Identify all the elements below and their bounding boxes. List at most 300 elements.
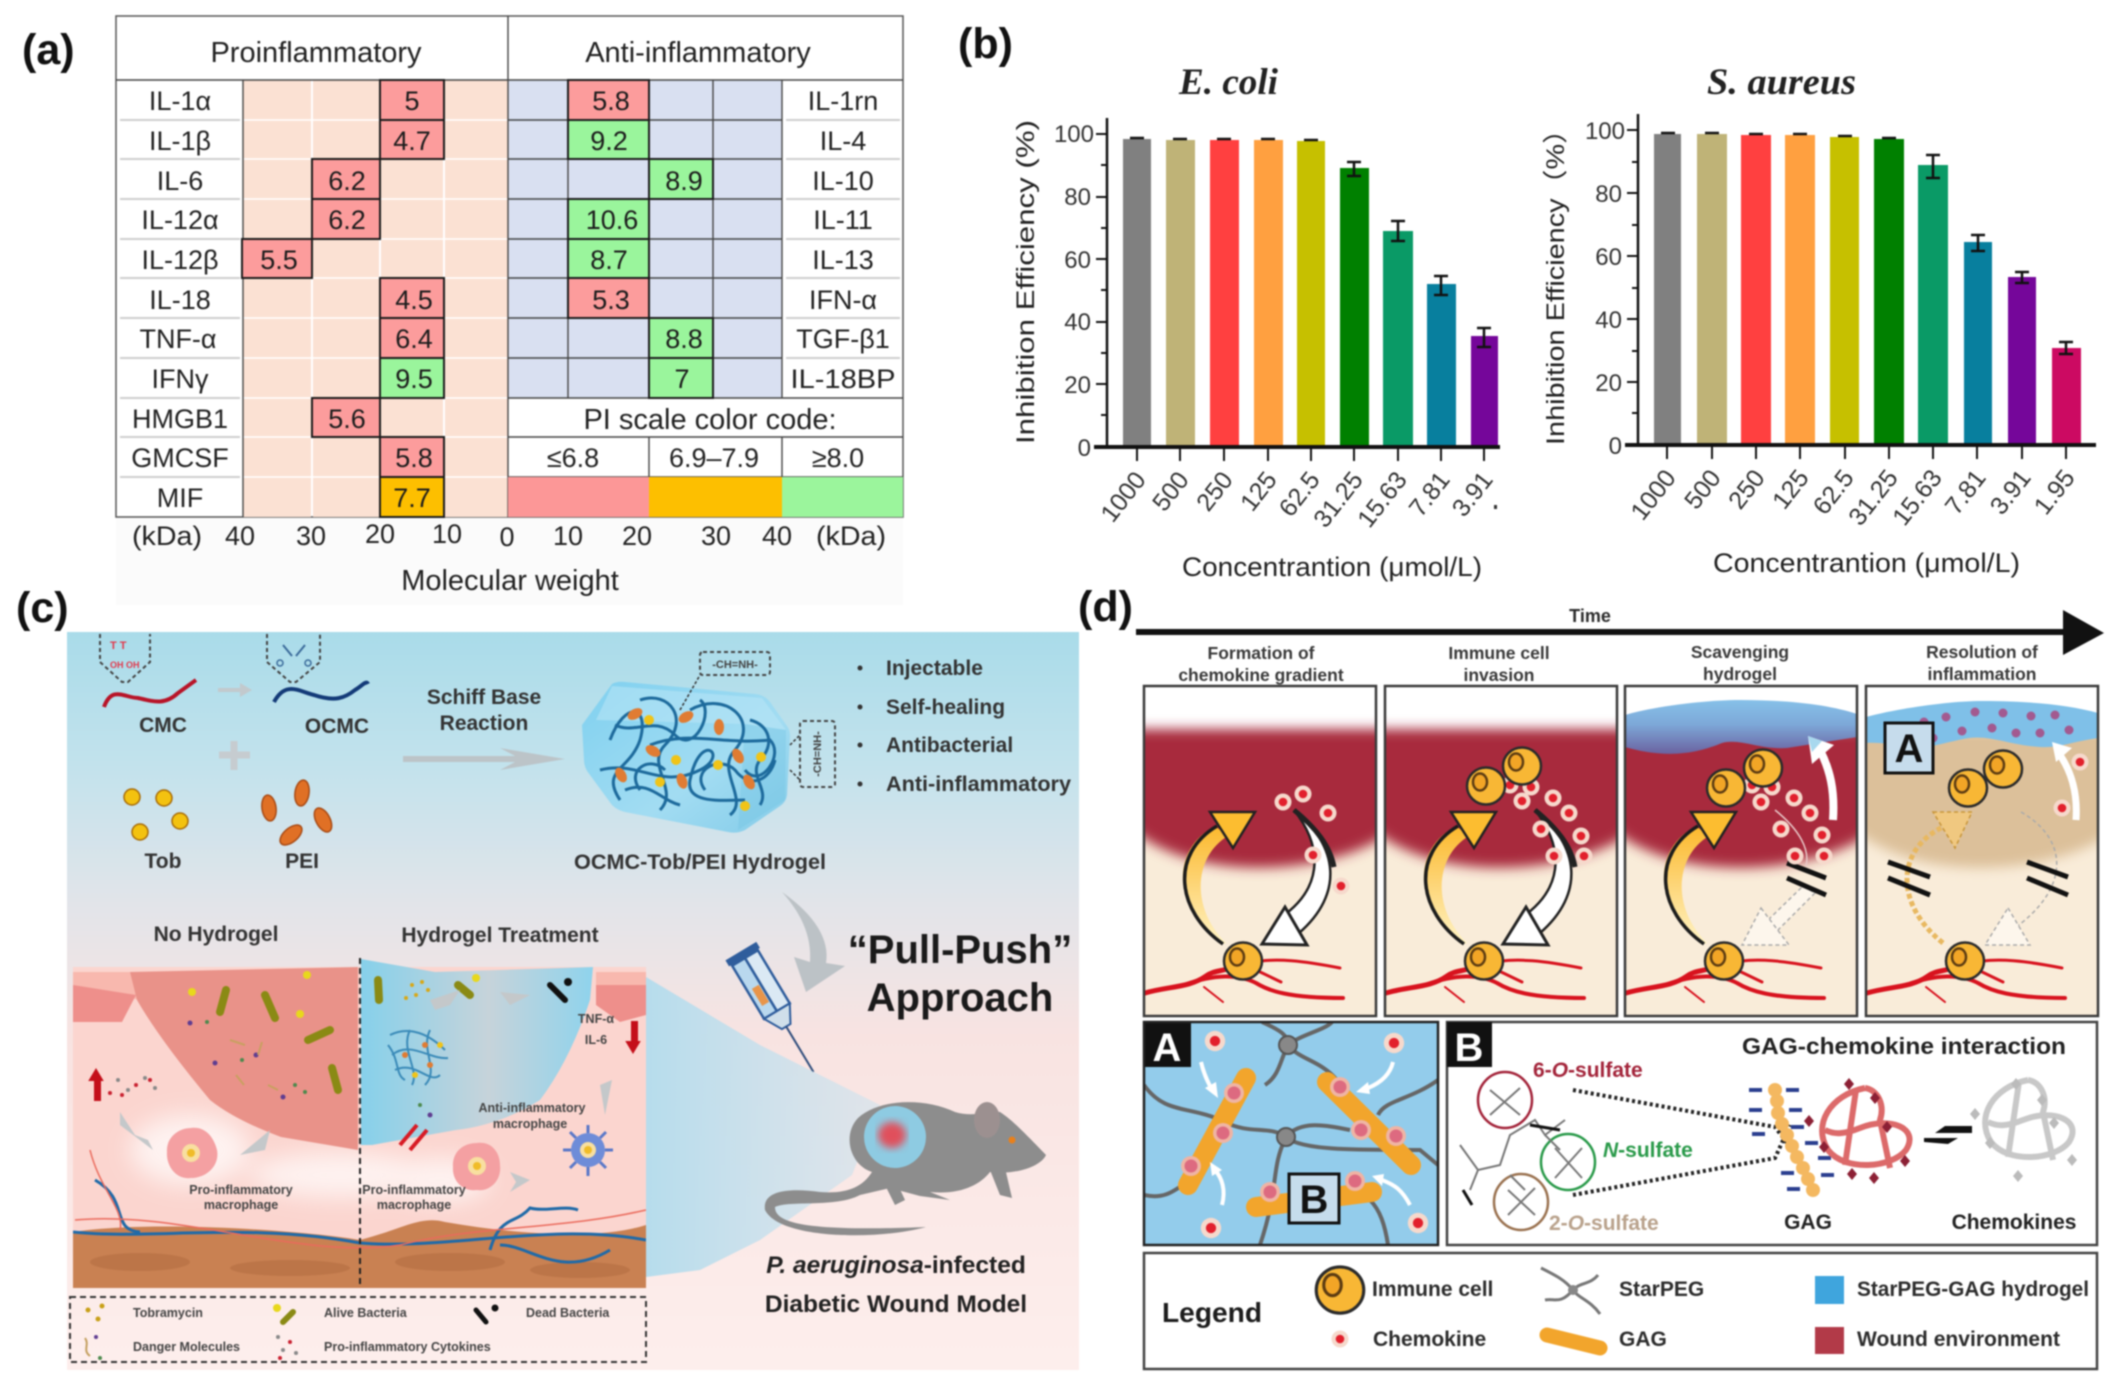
- callout: vertical bond: [800, 721, 835, 787]
- x tick labels: 15.63: [1887, 464, 1948, 531]
- heading: proinflammatory: Proinflammatory: [210, 37, 422, 69]
- wound environment: [1611, 729, 1871, 868]
- CMC label: CMC: [139, 714, 187, 737]
- chart title: E. coli: [1178, 62, 1279, 103]
- macrophage labels: [189, 1101, 586, 1212]
- PI scale colour code: ≥8.0: [812, 443, 864, 473]
- dashed arrow: [1742, 886, 1815, 945]
- x tick labels: 500: [1679, 464, 1727, 515]
- right row labels: IL-18BP: [790, 364, 896, 394]
- left cell values: 5: [404, 86, 420, 116]
- x tick labels: 250: [1191, 466, 1239, 517]
- molecular weight axis labels: 0: [499, 522, 515, 552]
- left cell values: 9.5: [395, 364, 433, 394]
- dashed immune arrow: [1907, 812, 1972, 943]
- CMC molecule: [100, 634, 196, 707]
- y tick labels: 60: [1064, 247, 1091, 274]
- blocked path marker: [400, 1125, 427, 1150]
- dotted connectors: [1573, 1090, 1800, 1195]
- macrophage labels: macrophage: [377, 1198, 451, 1212]
- molecular weight axis labels: 40: [762, 521, 792, 551]
- label: 6-O-sulfate: 6-O-sulfate: [1533, 1059, 1643, 1082]
- callout: CH=N- bond: [700, 652, 770, 675]
- GAG chain: [1768, 1083, 1820, 1197]
- left row labels: MIF: [157, 483, 203, 513]
- positive charges gray: [1970, 1078, 2077, 1182]
- reaction arrow: CMC to OCMC: [218, 683, 252, 697]
- label: 2-O-sulfate: 2-O-sulfate: [1549, 1212, 1659, 1235]
- cytokine decrease arrow: [627, 1022, 639, 1052]
- step heading 3: Scavenging: [1691, 642, 1789, 662]
- inset marker A: [1885, 723, 1933, 773]
- step heading 2: Immune cell: [1448, 643, 1550, 663]
- property bullets: Antibacterial: [886, 734, 1013, 757]
- x tick labels: 500: [1147, 466, 1195, 517]
- x tick labels: 31.25: [1308, 466, 1369, 533]
- chemokines: [2054, 754, 2088, 816]
- property bullets: [858, 657, 1071, 796]
- error bars: [1130, 138, 1491, 347]
- label: GAG: GAG: [1784, 1211, 1832, 1234]
- legend item: cytokines: [276, 1335, 491, 1360]
- OCMC label: OCMC: [305, 715, 369, 738]
- step heading 4: [1926, 642, 2038, 684]
- dashed return arrow: [1985, 812, 2057, 945]
- vessel: [1386, 960, 1584, 1002]
- left cell values: 7.7: [393, 483, 431, 513]
- network nodes: [1277, 1036, 1297, 1146]
- table footer band: [116, 517, 903, 605]
- icon: syringe: [725, 942, 829, 1081]
- heading: hydrogel treatment: Hydrogel Treatment: [401, 924, 599, 947]
- immune cell: [1224, 942, 1262, 980]
- Schiff base text: Schiff Base: [427, 686, 541, 709]
- legend: wound environment: Wound environment: [1857, 1328, 2060, 1351]
- tissue layer: [73, 1220, 646, 1288]
- wound model caption: [765, 1252, 1027, 1318]
- dead bacteria: [550, 978, 572, 1000]
- left cell values: 6.4: [395, 324, 433, 354]
- right cell values: 5.8: [592, 86, 630, 116]
- macrophage labels: Pro-inflammatory: [189, 1183, 293, 1197]
- macrophage labels: macrophage: [493, 1117, 567, 1131]
- right row labels: IL-10: [812, 166, 874, 196]
- x tick labels: 125: [1767, 464, 1815, 515]
- panel d: timeline arrow: [1136, 606, 2104, 655]
- x tick labels: [1095, 466, 1499, 533]
- heading: pull-push approach: [848, 928, 1072, 1020]
- danger molecule strands: [230, 1040, 278, 1090]
- axes and ticks: [1625, 114, 2096, 459]
- resolved wound environment: [1852, 729, 2112, 868]
- white upper tissue: [1385, 686, 1617, 736]
- macrophage left: [167, 1128, 217, 1178]
- legend item: dead bacteria: [476, 1304, 610, 1322]
- inset marker B: [1289, 1174, 1339, 1223]
- PEI particles: [260, 779, 335, 849]
- hydrogel layer: [1866, 701, 2098, 748]
- wound model caption: P. aeruginosa-infected: [766, 1252, 1026, 1279]
- immune arrow: [1183, 812, 1255, 944]
- rat wound site: [864, 1106, 926, 1168]
- y axis label: Inhibition Efficiency（%）: [1542, 115, 1570, 445]
- hydrogel cube: [582, 675, 800, 833]
- immune cells: [1946, 750, 2022, 980]
- right cell values: 8.8: [665, 324, 703, 354]
- left row labels: IFNγ: [152, 364, 209, 394]
- left cell values: 4.7: [393, 126, 431, 156]
- vessel: [1145, 960, 1343, 1002]
- molecular weight axis labels: 40: [225, 521, 255, 551]
- left row labels: TNF-α: [139, 324, 217, 354]
- hydrogel layer: [1625, 700, 1857, 754]
- step heading 2: invasion: [1464, 665, 1534, 685]
- legend: wound symbols: [70, 1297, 646, 1362]
- table frame: [116, 16, 903, 517]
- y tick labels: 0: [1609, 433, 1622, 460]
- chemokines: [1744, 776, 1832, 864]
- legend: immune cell: [1316, 1267, 1493, 1313]
- scavenging arrow: [2052, 742, 2076, 820]
- cytokine labels: [578, 1012, 614, 1047]
- heading: GAG-chemokine interaction: [1742, 1033, 2066, 1059]
- right row labels: IL-13: [812, 245, 874, 275]
- white upper tissue: [1144, 686, 1376, 736]
- axis title: molecular weight: Molecular weight: [401, 565, 619, 597]
- corner tag B: [1447, 1022, 1492, 1070]
- error bars: [1661, 133, 2073, 354]
- skin edge: [73, 972, 646, 1022]
- label: Chemokines: Chemokines: [1952, 1211, 2076, 1234]
- panel d: timeline arrow: Time: [1569, 606, 1611, 626]
- alive bacteria: [220, 980, 470, 1090]
- tissue mottling: [90, 1253, 630, 1278]
- macrophage labels: Anti-inflammatory: [479, 1101, 586, 1115]
- right cell values: 8.7: [590, 245, 628, 275]
- tissue background: [72, 966, 646, 1240]
- PI scale colour code: ≤6.8: [547, 443, 599, 473]
- inset panel A: hydrogel network: [1144, 1022, 1438, 1245]
- step heading 4: Resolution of: [1926, 642, 2038, 662]
- legend item: tobramycin: [86, 1304, 203, 1322]
- x tick labels: 1000: [1095, 466, 1152, 528]
- y axis label: Inhibition Efficiency (%): [1012, 120, 1040, 444]
- left row labels: IL-6: [157, 166, 203, 196]
- CMC molecule: T T: [110, 640, 127, 652]
- pro-inflammatory cytokines: [116, 1076, 157, 1092]
- right row labels: IL-1rn: [808, 86, 878, 116]
- blood vessels: [73, 1150, 646, 1262]
- left row labels: HMGB1: [132, 404, 228, 434]
- white upper tissue: [1625, 686, 1857, 736]
- x tick labels: 15.63: [1352, 466, 1413, 533]
- wound environment: [1371, 729, 1631, 868]
- right cell values: [586, 86, 703, 394]
- y tick labels: 20: [1595, 370, 1622, 397]
- chemokine knot red: [1822, 1088, 1910, 1168]
- legend panel: [1144, 1253, 2097, 1369]
- left row labels: GMCSF: [131, 443, 229, 473]
- step heading 2: [1448, 643, 1550, 685]
- chart title: S. aureus: [1707, 62, 1856, 103]
- molecular weight axis labels: 10: [432, 519, 462, 549]
- OCMC molecule: [267, 634, 368, 702]
- right cell values: 5.3: [592, 285, 630, 315]
- inset marker A: A: [1895, 727, 1923, 771]
- Schiff base text: [427, 686, 541, 735]
- step heading 1: [1178, 643, 1344, 685]
- molecular weight axis labels: (kDa): [816, 521, 886, 551]
- macrophage labels: macrophage: [204, 1198, 278, 1212]
- legend item: alive bacteria: Alive Bacteria: [324, 1306, 408, 1320]
- panel label: (d): (d): [1078, 583, 1133, 631]
- label: N-sulfate: N-sulfate: [1603, 1139, 1693, 1162]
- right cell values: 7: [674, 364, 690, 394]
- legend: StarPEG: [1541, 1268, 1704, 1314]
- vessel: [1867, 960, 2065, 1002]
- y tick labels: 0: [1078, 435, 1091, 462]
- wound bed with hydrogel: [361, 959, 593, 1145]
- y tick labels: 60: [1595, 244, 1622, 271]
- left cell values: 4.5: [395, 285, 433, 315]
- macrophage centre: [453, 1143, 500, 1190]
- immune arrow: [1664, 812, 1736, 944]
- PI scale colour code: [508, 404, 903, 517]
- cytokine labels: TNF-α: [578, 1012, 614, 1026]
- vessel: [1626, 960, 1824, 1002]
- heading: pull-push approach: “Pull-Push”: [848, 928, 1072, 972]
- bars: [1123, 139, 1498, 447]
- x tick labels: 1.95: [2029, 464, 2081, 520]
- bars: [1654, 134, 2081, 445]
- step heading 1: Formation of: [1208, 643, 1315, 663]
- centre divider: [359, 958, 361, 1288]
- Schiff base arrow: [403, 748, 565, 770]
- negative charges: [1749, 1088, 1834, 1191]
- scavenged chemokines: [1920, 708, 2074, 742]
- molecular weight axis labels: 30: [296, 521, 326, 551]
- x tick labels: 7.81: [1940, 464, 1992, 520]
- x tick labels: [1625, 464, 2081, 531]
- panel label: (a): (a): [22, 26, 75, 74]
- panel b: E. coli bar chart: [1012, 62, 1500, 582]
- heading: anti-inflammatory: Anti-inflammatory: [585, 37, 811, 69]
- x tick labels: 62.5: [1274, 466, 1326, 522]
- anti-inflammatory PI cells: [568, 80, 713, 398]
- legend: GAG: GAG: [1619, 1328, 1667, 1351]
- PI scale colour code: 6.9–7.9: [669, 443, 759, 473]
- x tick labels: 3.91: [1985, 464, 2037, 520]
- legend: immune cell: Immune cell: [1372, 1278, 1493, 1301]
- legend: chemokine: Chemokine: [1373, 1328, 1486, 1351]
- break marks: [1787, 863, 1826, 895]
- molecular weight axis labels: (kDa): [132, 521, 202, 551]
- corner tag B: B: [1455, 1026, 1483, 1070]
- y tick labels: 40: [1595, 307, 1622, 334]
- pale tissue zones: [130, 1115, 490, 1202]
- molecular weight axis labels: 20: [622, 521, 652, 551]
- scavenging arrow: [1808, 736, 1834, 820]
- left row labels: IL-18: [149, 285, 211, 315]
- x tick labels: 250: [1723, 464, 1771, 515]
- hydrogel fragment: [388, 1030, 448, 1085]
- x axis title: Concentrantion (μmol/L): [1182, 552, 1482, 582]
- CMC molecule: OH OH: [110, 660, 140, 670]
- return arrow: [1262, 810, 1334, 945]
- y tick labels: 80: [1595, 181, 1622, 208]
- immune cells: [1705, 750, 1782, 980]
- property bullets: Anti-inflammatory: [886, 773, 1071, 796]
- right row labels: [790, 86, 896, 394]
- right cell values: 8.9: [665, 166, 703, 196]
- panel a: cytokine table: [116, 16, 903, 605]
- danger molecules: [188, 1020, 432, 1118]
- chemokine knot gray: [1985, 1080, 2073, 1160]
- left cell values: [260, 86, 433, 513]
- inset marker B: B: [1300, 1178, 1328, 1222]
- legend item: alive bacteria: [273, 1304, 408, 1322]
- x tick labels: 62.5: [1808, 464, 1860, 520]
- callout: CH=N- bond: -CH=NH-: [712, 659, 758, 671]
- binding arrows: [1201, 1062, 1410, 1205]
- axis label artifact: [1494, 505, 1497, 509]
- panel c: hydrogel schematic: [67, 632, 1079, 1370]
- x tick labels: 31.25: [1843, 464, 1904, 531]
- step panel 4: resolution of inflammation: [1852, 686, 2112, 1016]
- property bullets: Injectable: [886, 657, 983, 680]
- step heading 4: inflammation: [1928, 664, 2036, 684]
- legend: StarPEG-GAG hydrogel: [1815, 1276, 2089, 1304]
- Tob particles: [124, 789, 188, 840]
- grid lines: [243, 120, 508, 477]
- curved arrow to syringe: [782, 892, 845, 992]
- step panel 3: scavenging hydrogel: [1611, 686, 1871, 1016]
- molecular weight axis labels: 30: [701, 521, 731, 551]
- y tick labels: 100: [1054, 121, 1094, 148]
- binding arrow heads: [1205, 1082, 1384, 1186]
- step heading 3: [1691, 642, 1789, 684]
- y tick labels: [1054, 121, 1094, 462]
- panel label: (c): (c): [16, 584, 69, 632]
- y tick labels: 80: [1064, 184, 1091, 211]
- wound model caption: Diabetic Wound Model: [765, 1291, 1027, 1318]
- left cell values: 5.8: [395, 443, 433, 473]
- panel background: [67, 632, 1079, 1370]
- left cell values: 6.2: [328, 205, 366, 235]
- left row labels: [131, 86, 229, 513]
- heading: pull-push approach: Approach: [867, 976, 1053, 1020]
- Tob label: Tob: [145, 850, 181, 873]
- break marks: [1888, 862, 2068, 895]
- icon: rat: [765, 1102, 1046, 1235]
- chemokines: [1502, 776, 1592, 864]
- legend item: danger molecules: Danger Molecules: [133, 1340, 240, 1354]
- x tick labels: 3.91: [1447, 466, 1499, 522]
- legend item: cytokines: Pro-inflammatory Cytokines: [324, 1340, 491, 1354]
- wound environment: [1130, 729, 1390, 868]
- wound cross-section: [73, 958, 646, 1288]
- x tick labels: 1000: [1625, 464, 1682, 526]
- fading return path: [1775, 810, 1807, 866]
- GAG rods: [1188, 1078, 1411, 1207]
- proinflammatory column backgrounds: [243, 80, 508, 517]
- right row labels: IL-11: [813, 205, 873, 235]
- inset panel B: GAG-chemokine interaction: [1447, 1022, 2097, 1245]
- right row labels: IFN-α: [809, 285, 877, 315]
- x tick labels: 125: [1235, 466, 1283, 517]
- PEI label: PEI: [285, 850, 319, 873]
- sugar skeleton: [1460, 1088, 1582, 1215]
- corner tag A: [1144, 1022, 1191, 1070]
- molecular weight axis labels: 20: [365, 519, 395, 549]
- property bullets: Self-healing: [886, 696, 1005, 719]
- right cell values: 9.2: [590, 126, 628, 156]
- equilibrium arrows: [1924, 1126, 1972, 1144]
- Schiff base text: Reaction: [440, 712, 528, 735]
- callout: vertical bond: -CH=NH-: [812, 731, 824, 777]
- x axis title: Concentrantion (μmol/L): [1713, 548, 2020, 578]
- bound chemokines: [1181, 1077, 1406, 1202]
- immune arrow: [1424, 812, 1496, 944]
- step panel 1: chemokine gradient: [1130, 686, 1390, 1016]
- proinflammatory PI cells: [242, 80, 444, 517]
- projection cone to rat: [646, 977, 880, 1277]
- step panel 2: immune cell invasion: [1371, 686, 1631, 1016]
- sulfate circles: [1478, 1072, 1595, 1230]
- y tick labels: 100: [1585, 118, 1625, 145]
- macrophage blue: [563, 1125, 613, 1176]
- y tick labels: 40: [1064, 309, 1091, 336]
- y tick labels: [1585, 118, 1625, 460]
- return arrow: [1503, 810, 1575, 945]
- molecular weight axis labels: 10: [553, 521, 583, 551]
- panel b: S. aureus bar chart: [1542, 62, 2096, 578]
- gray flow arrows: [120, 990, 612, 1192]
- legend: StarPEG: StarPEG: [1619, 1278, 1704, 1301]
- cytokine labels: IL-6: [585, 1033, 607, 1047]
- left row labels: IL-12α: [141, 205, 219, 235]
- positive charges red: [1804, 1078, 1910, 1184]
- wound bed without hydrogel: [130, 967, 358, 1150]
- immune cells: [1465, 748, 1541, 980]
- step heading 1: chemokine gradient: [1178, 665, 1344, 685]
- hydrogel label: OCMC-Tob/PEI Hydrogel: [574, 851, 826, 874]
- white upper tissue: [1866, 686, 2098, 736]
- panel label: (b): (b): [958, 20, 1013, 68]
- cytokine increase arrow: [90, 1070, 102, 1100]
- heading: no hydrogel: No Hydrogel: [154, 923, 278, 946]
- plus sign: [219, 741, 250, 770]
- yellow particles: [188, 971, 480, 1018]
- step heading 3: hydrogel: [1703, 664, 1777, 684]
- corner tag A: A: [1153, 1026, 1181, 1070]
- PI scale colour code: PI scale color code:: [583, 404, 837, 436]
- left cell values: 6.2: [328, 166, 366, 196]
- chemokines: [1274, 786, 1350, 894]
- legend: GAG: [1547, 1328, 1667, 1351]
- left row labels: IL-1α: [149, 86, 211, 116]
- molecular weight axis labels: [132, 519, 886, 552]
- left cell values: 5.5: [260, 245, 298, 275]
- right cell values: 10.6: [586, 205, 638, 235]
- StarPEG network: [1144, 1022, 1438, 1245]
- legend item: tobramycin: Tobramycin: [133, 1306, 203, 1320]
- left row labels: IL-12β: [141, 245, 219, 275]
- legend heading: Legend: [1162, 1297, 1262, 1328]
- x tick labels: 7.81: [1404, 466, 1456, 522]
- right row labels: IL-4: [820, 126, 866, 156]
- legend: StarPEG-GAG hydrogel: StarPEG-GAG hydrogel: [1857, 1278, 2089, 1301]
